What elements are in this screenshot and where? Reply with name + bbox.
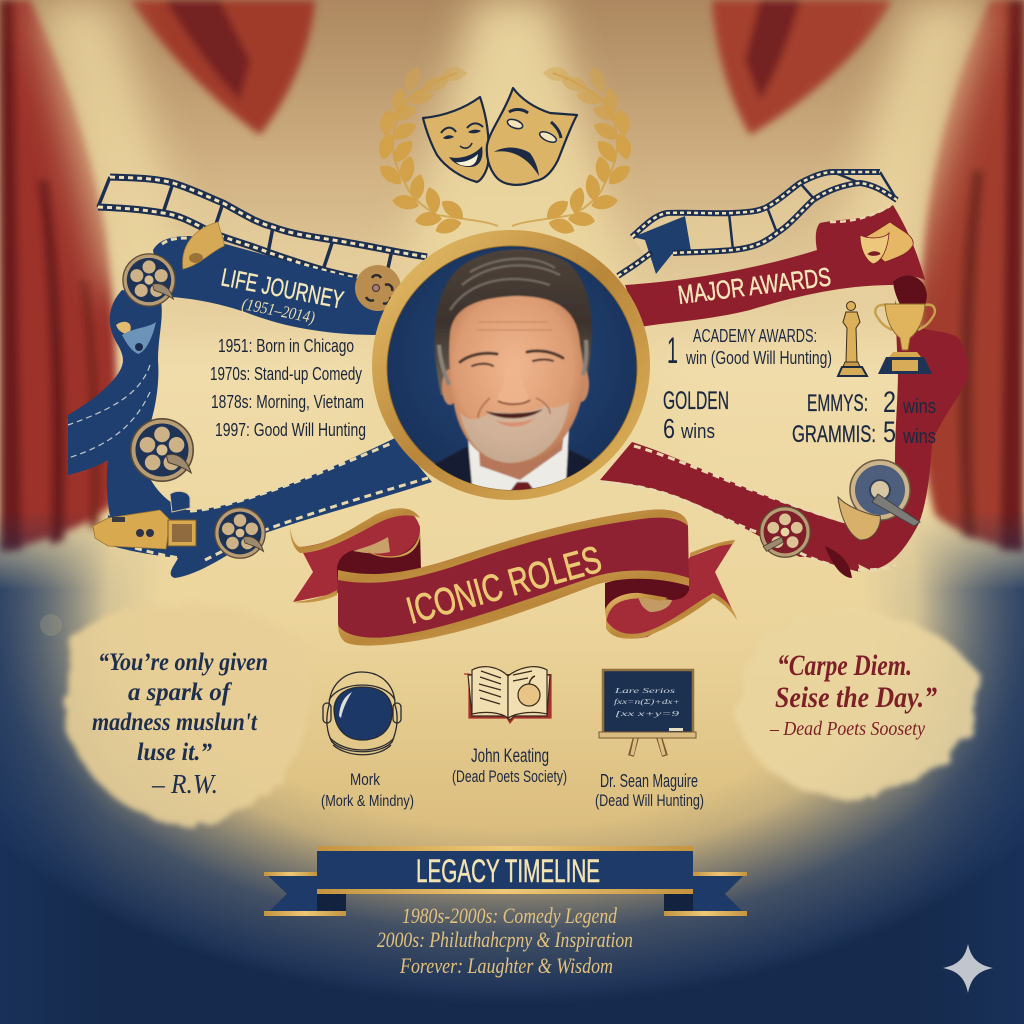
text block: life journey list: 1878s: Morning, Vietnam <box>211 392 364 412</box>
role: john keating <box>452 667 567 786</box>
text block: legacy timeline list: Forever: Laughter & Wisdom <box>399 953 613 978</box>
laurel wreath <box>375 64 635 237</box>
blue lower band <box>108 438 432 578</box>
icon: cookie reel <box>355 265 401 311</box>
quote cloud: left <box>65 604 312 825</box>
text block: right quote <box>769 649 937 740</box>
text block: golden globes: 6 <box>663 413 675 444</box>
back left fold <box>337 530 421 584</box>
heading: years: (1951–2014) <box>240 294 317 327</box>
back left tail <box>290 509 420 602</box>
left tail <box>264 872 346 916</box>
back right fold <box>605 560 689 612</box>
hair highlights <box>450 259 560 310</box>
blue title banner <box>153 236 392 335</box>
icon: film reel 2 <box>131 419 193 481</box>
text block: left quote: “You’re only given <box>98 649 268 676</box>
text block: legacy timeline list: 1980s-2000s: Comedy Legend <box>402 903 618 928</box>
heading: legacy timeline: LEGACY TIMELINE <box>416 853 600 889</box>
text block: life journey list <box>210 336 366 440</box>
icon: gold mask on ribbon <box>183 222 224 269</box>
label: dead will hunting: (Dead Will Hunting) <box>595 791 704 810</box>
icon: camera <box>93 491 196 549</box>
back hair <box>435 249 592 396</box>
heading: life journey: LIFE JOURNEY <box>219 263 346 315</box>
gold ring <box>372 230 650 500</box>
face details <box>460 351 563 362</box>
label: mork and mindy: (Mork & Mindny) <box>321 793 414 810</box>
emblem: laurel wreath and comedy tragedy masks <box>375 64 635 237</box>
film strip: top left <box>98 177 427 278</box>
text block: emmys and grammys: wins <box>902 396 936 418</box>
icon: film reel 3 <box>215 508 265 558</box>
icon: trophy <box>875 304 935 374</box>
chalk writing <box>613 687 680 718</box>
portrait <box>434 248 593 490</box>
text block: emmys and grammys: wins <box>902 426 936 448</box>
icon: red film reel <box>760 507 810 557</box>
icon: crescent mask <box>113 309 160 355</box>
text block: emmys and grammys: 5 <box>883 416 896 449</box>
text block: right quote: Seise the Day.” <box>775 681 937 714</box>
red title banner <box>625 205 925 327</box>
text block: left quote: – R.W. <box>151 769 218 799</box>
text block: academy awards: ACADEMY AWARDS: <box>693 326 817 346</box>
blue side band <box>68 290 190 555</box>
icon: chalkboard <box>599 670 696 756</box>
curtains <box>0 0 1024 552</box>
icon: open book with apple <box>464 667 551 723</box>
heading: iconic roles: ICONIC ROLES <box>402 539 606 633</box>
panel: life journey ribbon <box>68 222 432 578</box>
icon: film reel 1 <box>123 254 175 306</box>
icon: large reel with pick <box>838 460 920 540</box>
face <box>449 296 584 463</box>
mask: comedy <box>423 97 489 182</box>
navy vignette <box>0 514 1024 1024</box>
text block: emmys and grammys: EMMYS: <box>807 390 868 417</box>
text block: life journey list: 1997: Good Will Hunting <box>215 420 366 440</box>
chalk writing: Lare Serios <box>613 687 676 695</box>
sprocket holes <box>602 446 895 570</box>
text block: life journey list: 1970s: Stand-up Comedy <box>210 364 362 384</box>
red side band <box>830 300 969 570</box>
lens flare spot <box>40 614 62 636</box>
text block: right quote: “Carpe Diem. <box>777 649 912 682</box>
icon: sparkle watermark <box>943 944 993 993</box>
film strip: top right <box>618 172 897 276</box>
text block: left quote: a spark of <box>128 679 233 706</box>
beard <box>460 402 569 463</box>
text block: right quote: – Dead Poets Soosety <box>769 718 925 740</box>
text block: academy awards: 1 <box>667 330 678 371</box>
quote cloud: right <box>735 610 977 800</box>
text block: emmys and grammys: 2 <box>883 386 896 419</box>
chalk writing: fxx=n(Σ)+dx+ <box>614 698 680 706</box>
icon: oscar statuette <box>838 302 867 376</box>
text block: left quote: luse it.” <box>137 739 212 766</box>
text block: golden globes: wins <box>680 421 715 443</box>
text block: golden globes: GOLDEN <box>663 387 729 415</box>
text block: legacy timeline list <box>377 903 633 978</box>
gold edges <box>338 510 688 583</box>
chalk writing: [xx x+y=9 <box>615 710 680 718</box>
text block: life journey list: 1951: Born in Chicago <box>218 336 354 356</box>
icon: astronaut helmet <box>323 672 401 755</box>
text block: legacy timeline list: 2000s: Philuthahcpny & Inspiration <box>377 927 633 952</box>
text block: academy awards <box>667 326 832 371</box>
text block: emmys and grammys <box>792 386 936 449</box>
back right tail <box>606 540 737 639</box>
main ribbon <box>338 510 689 644</box>
icon: small masks <box>860 222 913 264</box>
role: mork <box>321 672 414 810</box>
banner: iconic roles <box>290 508 737 646</box>
mask: tragedy <box>487 88 577 185</box>
text block: left quote: madness muslun't <box>92 709 258 736</box>
label: dead poets society: (Dead Poets Society) <box>452 767 567 786</box>
text block: left quote <box>92 649 268 799</box>
sprocket holes <box>135 443 428 560</box>
text block: golden globes <box>663 387 729 444</box>
panel: major awards ribbon <box>600 205 969 578</box>
portrait medallion <box>372 230 650 500</box>
label: john keating: John Keating <box>471 746 549 767</box>
red lower band <box>600 442 860 572</box>
banner: legacy timeline <box>264 846 747 916</box>
right tail <box>664 872 747 916</box>
label: sean maguire: Dr. Sean Maguire <box>600 771 698 791</box>
role: sean maguire <box>595 670 704 810</box>
label: mork: Mork <box>350 770 380 789</box>
text block: emmys and grammys: GRAMMIS: <box>792 421 876 448</box>
heading: major awards: MAJOR AWARDS <box>676 261 833 310</box>
text block: academy awards: win (Good Will Hunting) <box>685 348 832 368</box>
main band <box>317 846 693 894</box>
